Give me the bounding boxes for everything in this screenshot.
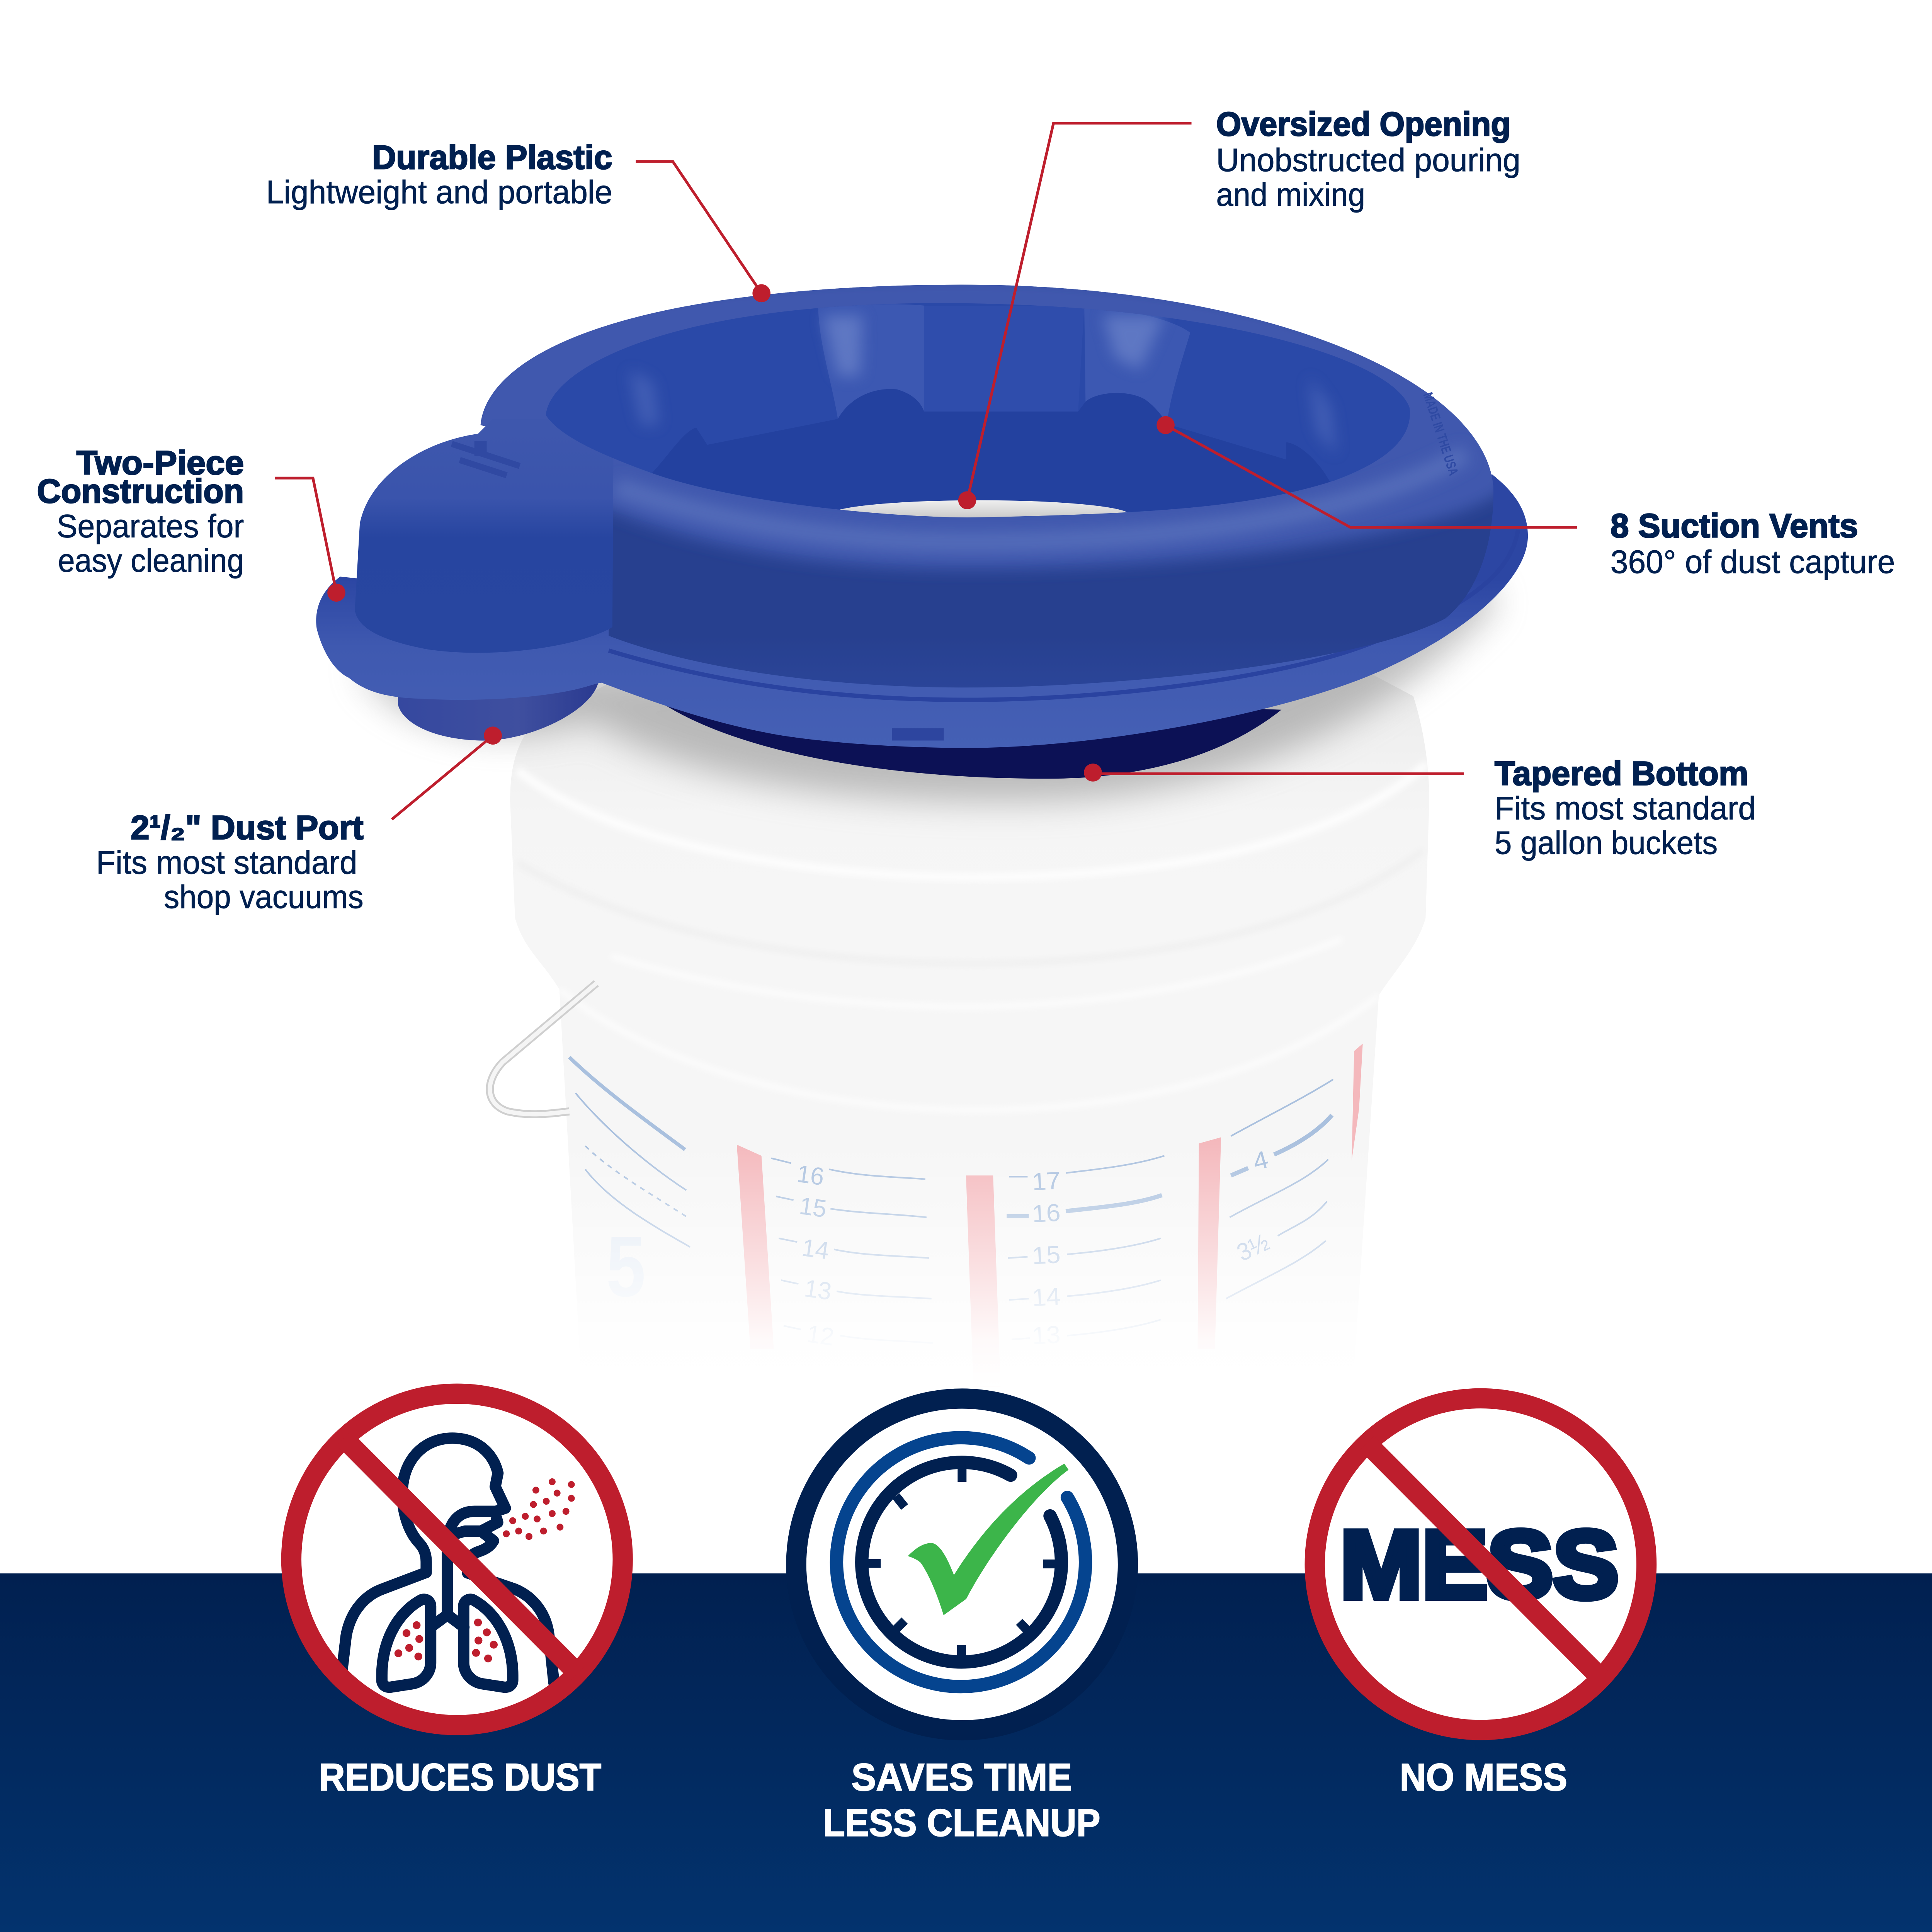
label: saves time less cleanup: LESS CLEANUP (823, 1801, 1100, 1844)
embossed logo (451, 441, 520, 478)
measurement scale centre: 14 (1031, 1282, 1061, 1311)
rim surface (468, 277, 1506, 569)
bottom navy band (0, 1573, 1932, 1932)
measurement scale right (1226, 1079, 1333, 1299)
leader dot (752, 284, 770, 302)
callout: durable plastic (266, 138, 770, 302)
clock face arc (862, 1463, 1061, 1662)
heading: 8 Suction Vents (1611, 507, 1858, 544)
bucket body (560, 990, 1379, 1386)
measurement scale left (771, 1158, 933, 1351)
measurement scale side (569, 1057, 690, 1315)
interior floor with vents (592, 304, 1368, 542)
label: saves time less cleanup (823, 1756, 1100, 1844)
measurement scale centre: 17 (1031, 1167, 1061, 1196)
measurement scale centre: 15 (1031, 1240, 1061, 1270)
measurement scale right: 4 (1250, 1145, 1271, 1176)
mess word: MESS (1340, 1511, 1619, 1618)
leader dot (1156, 416, 1175, 434)
flange notch (892, 728, 944, 740)
description: Separates for (57, 508, 244, 544)
leader line (1166, 425, 1577, 527)
heading: Tapered Bottom (1495, 754, 1748, 792)
opening interior wall (546, 303, 1410, 517)
rim highlight (616, 453, 1466, 542)
icon: clock with check mark (796, 1399, 1128, 1730)
icon: no dust lungs (291, 1394, 623, 1725)
callout: tapered bottom (1084, 754, 1756, 861)
description: Fits most standard (1495, 790, 1756, 827)
measurement scale centre (1007, 1156, 1164, 1350)
outer ring (796, 1399, 1128, 1730)
dust particles (395, 1478, 575, 1662)
leader line (636, 162, 762, 293)
callout: two-piece construction: easy cleaning (58, 543, 244, 579)
leader line (275, 478, 337, 593)
icon disc (1315, 1399, 1646, 1730)
callout: suction vents (1156, 416, 1895, 580)
label: reduces dust: REDUCES DUST (319, 1756, 601, 1798)
tapered bottom (641, 687, 1281, 779)
drop shadow under lid (357, 579, 1497, 802)
green check mark (908, 1464, 1068, 1615)
leader dot (327, 584, 345, 602)
callout: two-piece construction: Construction (37, 472, 244, 510)
leader dot (1084, 764, 1102, 782)
main body (468, 277, 1506, 696)
dust port (398, 678, 599, 741)
leader dot (958, 491, 976, 509)
measurement scale left: 15 (798, 1192, 828, 1223)
callout: dust port (96, 726, 502, 915)
vent panels (924, 306, 1084, 412)
prohibition sign (291, 1394, 623, 1725)
dust separator lid (316, 277, 1528, 779)
icon: no mess (1315, 1398, 1646, 1730)
blue arc (837, 1438, 1085, 1687)
leader dot (484, 726, 502, 745)
measurement scale left: 16 (795, 1160, 826, 1191)
callout: oversized opening (958, 105, 1520, 509)
measurement stripes (737, 1044, 1363, 1386)
embossed lettering: MADE IN THE USA (1420, 391, 1461, 477)
heading: Oversized Opening (1216, 105, 1510, 143)
prohibition sign (1315, 1398, 1646, 1730)
human torso and lungs (342, 1438, 554, 1687)
description: Fits most standard (96, 844, 357, 881)
housing lobe (355, 419, 614, 653)
bucket (468, 665, 1454, 1386)
callout: oversized opening: and mixing (1216, 177, 1365, 213)
clock ticks (868, 1469, 1056, 1659)
callout: dust port: shop vacuums (164, 879, 364, 915)
measurement scale left: 12 (805, 1320, 836, 1351)
label: no mess: NO MESS (1400, 1756, 1567, 1798)
description: Unobstructed pouring (1216, 142, 1520, 178)
leader line (1093, 773, 1464, 774)
measurement scale right: 3½ (1233, 1228, 1273, 1267)
bucket fade (468, 1140, 1454, 1386)
heading: 2¹/₂" Dust Port (131, 809, 364, 847)
measurement scale centre: 13 (1031, 1320, 1061, 1350)
measurement scale left: 14 (800, 1233, 831, 1265)
heading: Durable Plastic (372, 138, 612, 176)
icon disc (291, 1394, 622, 1725)
vent highlights (628, 315, 1337, 456)
measurement scale centre: 16 (1031, 1199, 1061, 1228)
bucket rim (510, 665, 1429, 1110)
white opening (829, 500, 1130, 530)
measurement scale left: 13 (803, 1274, 833, 1305)
callout: tapered bottom: 5 gallon buckets (1495, 825, 1718, 861)
flange ridge (609, 530, 1518, 700)
heading: Two-Piece (77, 444, 244, 482)
measurement scale side: 5 (606, 1219, 646, 1315)
leader line (392, 736, 493, 820)
description: 360° of dust capture (1611, 544, 1895, 580)
label: saves time less cleanup: SAVES TIME (851, 1756, 1072, 1798)
callout: two-piece construction (37, 444, 345, 602)
flange (316, 474, 1528, 748)
bucket handle (490, 983, 596, 1114)
leader line (967, 123, 1192, 500)
description: Lightweight and portable (266, 174, 612, 210)
